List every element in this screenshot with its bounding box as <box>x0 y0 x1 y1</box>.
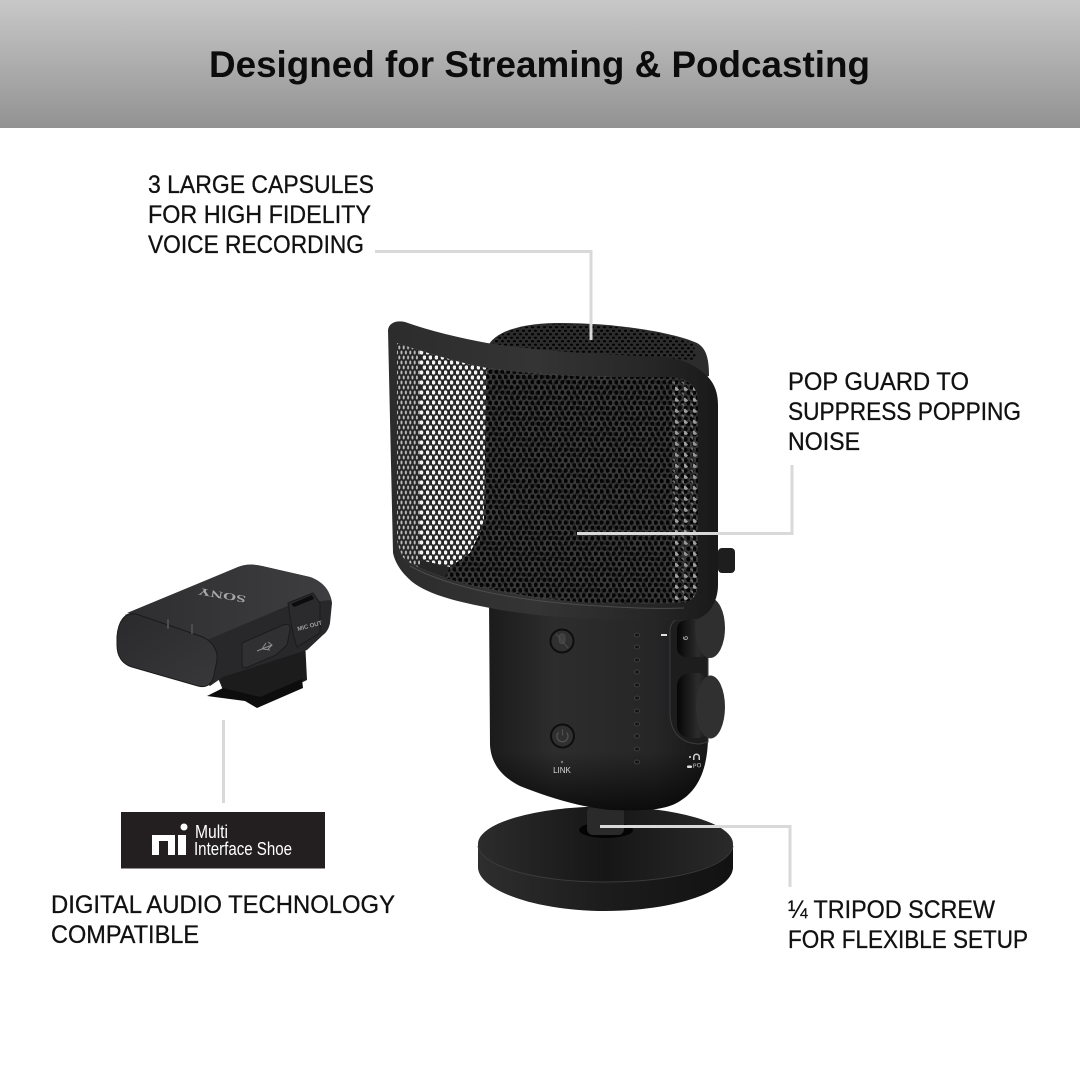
wireless receiver <box>117 565 332 708</box>
logo text: Interface Shoe <box>194 839 292 859</box>
label: capsules <box>148 171 374 259</box>
frame highlight <box>410 566 684 608</box>
leader line: receiver to logo <box>222 720 225 803</box>
label: capsules: VOICE RECORDING <box>148 231 364 259</box>
receiver top surface <box>127 565 331 640</box>
logo text <box>194 822 292 859</box>
microphone <box>388 321 735 911</box>
label: pop guard: POP GUARD TO <box>788 368 969 396</box>
leader line: pop guard <box>577 465 792 534</box>
headphone jack marking <box>687 754 702 770</box>
label: digital audio: DIGITAL AUDIO TECHNOLOGY <box>51 891 395 919</box>
label: tripod screw: FOR FLEXIBLE SETUP <box>788 926 1028 954</box>
receiver body <box>125 565 332 686</box>
SONY logo: SONY <box>196 585 247 604</box>
pop guard frame <box>388 321 718 621</box>
leader line: capsules <box>375 252 591 340</box>
label: capsules: 3 LARGE CAPSULES <box>148 171 374 199</box>
side screw <box>718 548 735 573</box>
label: tripod screw <box>788 896 1028 954</box>
label: pop guard: SUPPRESS POPPING <box>788 398 1021 426</box>
upper dial: 6 <box>683 636 690 640</box>
pop guard <box>388 321 718 621</box>
mic out cover: MIC OUT <box>297 620 323 633</box>
label: capsules: FOR HIGH FIDELITY <box>148 201 371 229</box>
label: pop guard: NOISE <box>788 428 860 456</box>
LINK label <box>553 761 572 775</box>
upper dial <box>677 598 725 658</box>
logo mark <box>152 824 188 855</box>
pop guard mesh <box>390 335 705 610</box>
header band <box>0 0 1080 128</box>
mic out cover <box>288 593 323 647</box>
base <box>478 806 733 911</box>
label: pop guard <box>788 368 1021 456</box>
label: digital audio: COMPATIBLE <box>51 921 199 949</box>
receiver front face <box>117 614 217 687</box>
gain indicator <box>661 634 667 636</box>
title: Designed for Streaming & Podcasting <box>209 44 870 85</box>
mic body <box>489 598 725 810</box>
receiver shoe <box>207 640 307 708</box>
Multi Interface Shoe logo <box>121 812 325 868</box>
power button <box>551 724 574 748</box>
mute button <box>550 630 574 652</box>
neck <box>587 806 624 835</box>
label: digital audio <box>51 891 395 949</box>
leader line: tripod screw <box>600 826 790 887</box>
lower dial <box>677 673 725 738</box>
logo text: Multi <box>195 822 228 842</box>
dial recess <box>670 620 708 744</box>
label: tripod screw: ¼ TRIPOD SCREW <box>788 896 995 924</box>
USB port cover <box>242 624 290 668</box>
LINK label: LINK <box>553 766 572 775</box>
top grille <box>488 323 709 380</box>
level indicator dots <box>634 633 640 764</box>
headphone jack marking: PO <box>692 763 702 770</box>
